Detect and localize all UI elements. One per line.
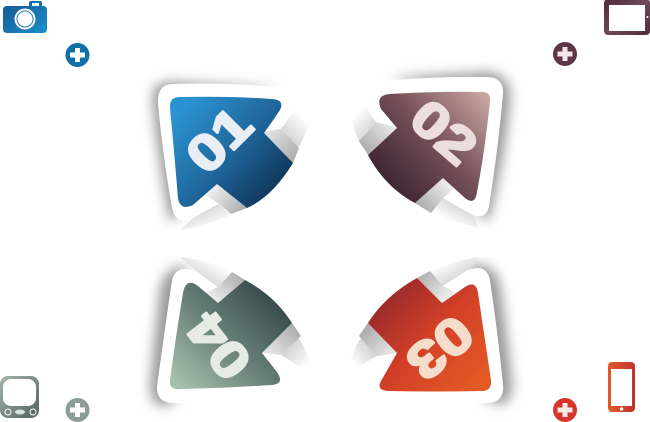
sticker shadow [390,72,510,222]
fold band lower [204,184,247,214]
white sticker [365,268,503,403]
arrow body [170,280,292,389]
arrow body [368,278,491,392]
fold shading [348,106,377,147]
fold shading [280,105,313,148]
sticker shadow [153,82,280,222]
panel: 04 slate green arrow sticker [150,257,313,407]
white sticker [365,77,503,216]
fold shading lower [431,198,478,227]
icon: tablet [604,0,650,35]
number 02: 02 [400,88,488,176]
panel: 01 blue arrow sticker [153,82,313,230]
arrow body [368,92,490,203]
icon: plus button blue [66,43,90,67]
icon: retro tv [0,376,39,418]
fold shading right [281,337,313,375]
fold shading top [428,257,478,286]
fold band right [262,323,301,355]
number 03: 03 [396,304,484,392]
number 04: 04 [175,301,262,390]
fold shading lower [180,204,231,230]
fold band top [417,271,456,303]
panel: 02 plum arrow sticker [348,72,510,227]
fold band left [359,122,397,155]
icon: plus button red [553,398,577,422]
icon: plus button gray [66,398,90,422]
white sticker [158,84,298,220]
icon: camera [3,1,47,33]
fold band top [205,272,245,303]
icon: plus button plum [553,42,577,66]
fold band right [262,129,299,163]
sticker shadow [150,266,190,407]
number 01: 01 [175,96,263,184]
icon: smartphone [608,362,635,412]
white sticker [157,269,298,403]
fold band lower [415,178,455,213]
sticker shadow [470,264,512,405]
panel: 03 red arrow sticker [347,257,512,405]
fold shading top [180,257,232,287]
fold shading left [347,337,377,373]
fold band left [359,323,397,356]
arrow body [170,97,293,208]
